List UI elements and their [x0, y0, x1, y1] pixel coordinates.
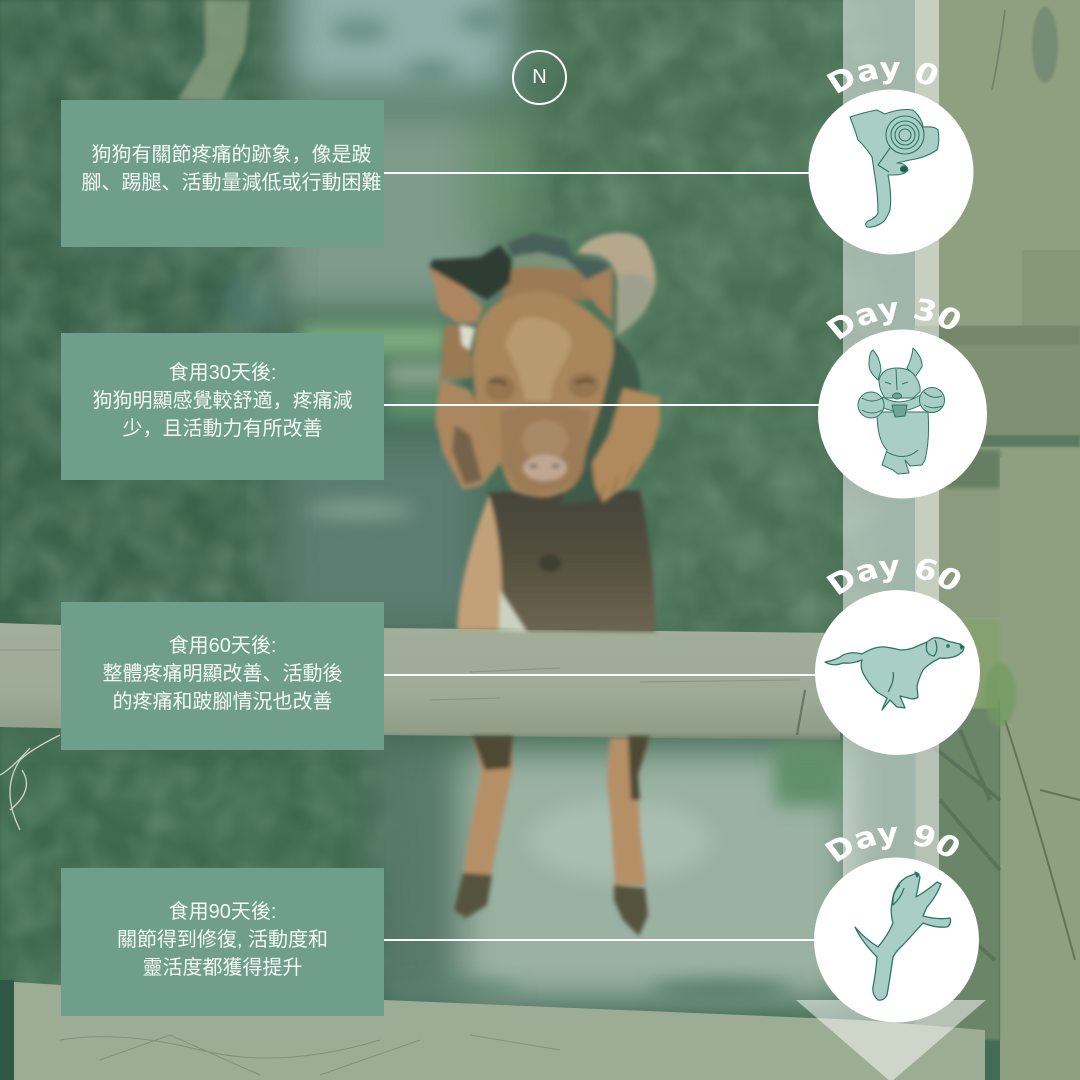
- wooden post, right: [915, 0, 1080, 1080]
- panel: after 30 days: 狗狗明顯感覺較舒適，疼痛減: [92, 390, 352, 412]
- panel: after 60 days: 的疼痛和跛腳情況也改善: [112, 691, 332, 713]
- panel: after 90 days: 關節得到修復, 活動度和: [117, 929, 328, 951]
- bottom fence rail: [0, 980, 985, 1080]
- day 30 label: Day 30: [826, 298, 960, 340]
- day 60 circle with running dog icon: [815, 590, 980, 755]
- day 0 label: Day 0: [826, 62, 938, 94]
- foliage texture: [0, 0, 854, 985]
- roots on the left: [0, 735, 60, 830]
- panel: after 30 days: 少，且活動力有所改善: [122, 418, 322, 440]
- tree branch top left: [178, 0, 250, 100]
- panel: after 60 days: 食用60天後:: [169, 635, 276, 657]
- panel: after 60 days: [61, 602, 384, 750]
- logo: N in circle: [512, 50, 567, 105]
- panel: after 60 days: 整體疼痛明顯改善、活動後: [102, 663, 342, 685]
- panel: after 90 days: [61, 868, 384, 1016]
- panel: after 30 days: 食用30天後:: [169, 362, 276, 384]
- panel: after 30 days: [61, 333, 384, 480]
- day 90 label: Day 90: [824, 825, 959, 862]
- connector line: day 0: [384, 172, 810, 174]
- panel: day 0 signs: [61, 100, 384, 247]
- panel: day 0 signs: 狗狗有關節疼痛的跡象，像是跛: [92, 144, 372, 166]
- logo: N in circle: N: [532, 66, 547, 88]
- icon: running dog: [825, 638, 964, 710]
- day 0 circle with leg icon: [808, 90, 974, 254]
- panel: day 0 signs: 腳、踢腿、活動量減低或行動困難: [82, 172, 382, 194]
- connector line: day 60: [384, 674, 816, 676]
- fence rail across the middle: [0, 623, 840, 740]
- icon: jumping dog: [855, 872, 951, 1000]
- day 60 label: Day 60: [826, 558, 960, 595]
- dog photo: head, ears and paws: [430, 233, 660, 505]
- icon: sore dog leg: [850, 110, 939, 227]
- icon: dog carrying rope toy: [858, 348, 944, 474]
- panel: after 90 days: 靈活度都獲得提升: [142, 957, 302, 979]
- panel: after 90 days: 食用90天後:: [169, 901, 276, 923]
- day 90 circle with jumping dog icon: [814, 858, 979, 1022]
- dog photo: body and hind legs: [454, 490, 655, 936]
- day 30 circle with dog and rope icon: [818, 330, 987, 498]
- connector line: day 90: [384, 939, 816, 941]
- connector line: day 30: [384, 404, 820, 406]
